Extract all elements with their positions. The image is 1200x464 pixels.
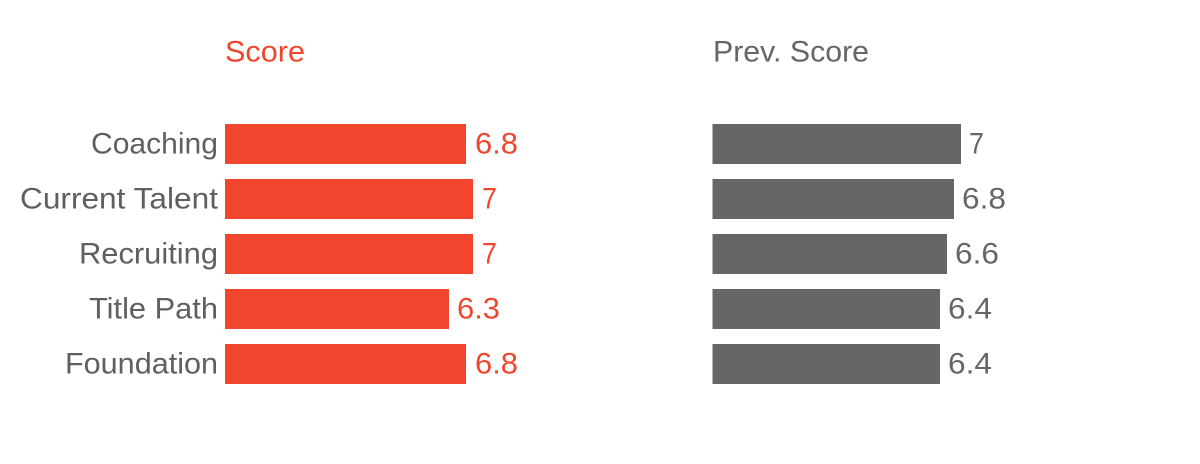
row: Coaching (91, 124, 518, 164)
row: Title Path (89, 289, 500, 329)
row: Recruiting (79, 234, 497, 274)
row: Coaching: 6.8 (475, 128, 518, 160)
panel: Score (20, 36, 518, 384)
row: Current Talent previous: 6.8 (962, 182, 1006, 216)
heading: Score: Score (225, 36, 305, 68)
row: Foundation: Foundation (65, 348, 218, 380)
row: Foundation previous (712, 344, 992, 384)
row: Recruiting: Recruiting (79, 238, 218, 270)
row: Title Path previous: 6.4 (948, 292, 992, 326)
row: Current Talent previous (712, 179, 1006, 219)
row: Coaching: Coaching (91, 128, 218, 160)
row: Coaching previous: 7 (969, 128, 984, 160)
row: Foundation previous: 6.4 (948, 348, 992, 380)
row: Title Path: 6.3 (457, 292, 500, 326)
row: Recruiting: 7 (482, 238, 497, 270)
row: Current Talent: 7 (482, 182, 497, 216)
row: Coaching previous (712, 124, 984, 164)
row: Title Path: Title Path (89, 292, 218, 326)
row: Foundation (65, 344, 518, 384)
row: Current Talent: Current Talent (20, 182, 219, 216)
row: Title Path previous (712, 289, 992, 329)
panel: Prev. Score (712, 36, 1006, 384)
row: Recruiting previous: 6.6 (955, 238, 999, 270)
row: Current Talent (20, 179, 497, 219)
row: Foundation: 6.8 (475, 348, 518, 380)
row: Recruiting previous (712, 234, 999, 274)
heading: Prev. Score: Prev. Score (713, 36, 869, 68)
